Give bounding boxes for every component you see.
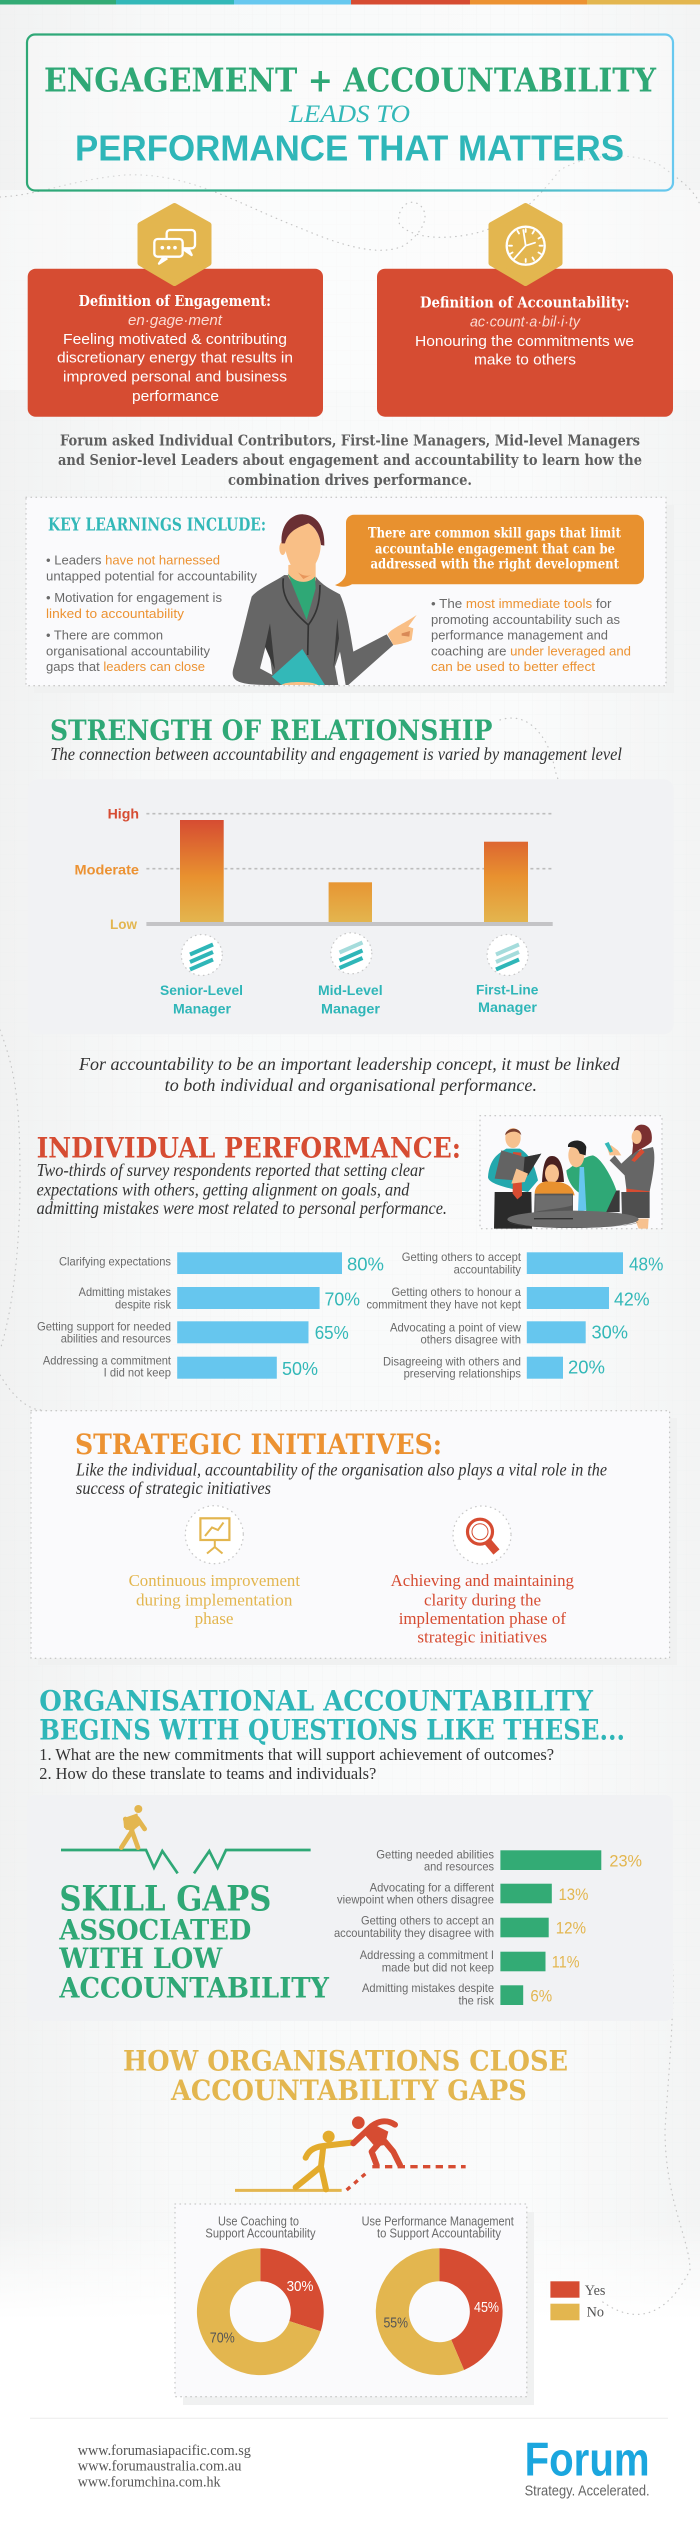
category labels: Senior-Level (160, 983, 243, 998)
bar chart: individual performance, right column (366, 1250, 663, 1381)
intro text (58, 432, 642, 489)
labels: Clarifying expectations (59, 1255, 171, 1269)
callout: addressed with the right development (370, 557, 619, 573)
values (282, 1255, 384, 1379)
values: 50% (282, 1359, 318, 1379)
panel: key learnings (26, 497, 674, 693)
bar chart: skill gaps: Getting others to accept an (361, 1914, 494, 1928)
heading: WITH LOW (58, 1942, 223, 1975)
description: Like the individual, accountability of the organisation also plays a vital role in the (75, 1459, 607, 1479)
callout: accountable engagement that can be (375, 541, 615, 557)
footer websites: www.forumaustralia.com.au (78, 2459, 242, 2475)
values: 80% (347, 1255, 384, 1275)
description: success of strategic initiatives (76, 1478, 271, 1498)
axis labels: Low (110, 916, 137, 932)
bars (180, 820, 528, 923)
definition text (57, 331, 293, 405)
text block: individual performance: expectations with others, getting alignment on goals, and (37, 1179, 410, 1199)
donut: coaching: 30% (287, 2278, 313, 2295)
bar chart: skill gaps: Getting needed abilities (376, 1847, 494, 1861)
right bullet: can be used to better effect (431, 659, 595, 674)
labels: Getting others to honour a (392, 1285, 521, 1299)
axis labels: Moderate (74, 861, 139, 877)
donut: coaching (197, 2248, 324, 2375)
pronunciation: en·gage·ment (128, 313, 223, 329)
title line 3: PERFORMANCE THAT MATTERS (75, 128, 624, 169)
labels: preserving relationships (404, 1367, 521, 1381)
heading (58, 1879, 330, 2004)
labels: others disagree with (420, 1332, 521, 1346)
heading: KEY LEARNINGS INCLUDE: (48, 516, 266, 536)
intro text: Forum asked Individual Contributors, First-line Managers, Mid-level Managers (60, 432, 640, 449)
definition text: Feeling motivated & contributing (63, 331, 287, 348)
bar chart: skill gaps: 12% (556, 1918, 586, 1937)
title line 2: LEADS TO (288, 101, 410, 128)
left bullets: linked to accountability (46, 606, 185, 621)
text: continuous improvement (129, 1571, 300, 1628)
icon: senior level (181, 934, 222, 976)
category labels: First-Line (476, 982, 539, 997)
definition text (415, 333, 634, 368)
category labels (160, 982, 539, 1017)
questions (39, 1745, 554, 1783)
heading: Definition of Accountability: (420, 295, 630, 312)
chart title: performance management: Use Performance Management (362, 2215, 514, 2229)
heading: STRATEGIC INITIATIVES: (75, 1428, 442, 1461)
intro text: and Senior-level Leaders about engagement and accountability to learn how the (58, 452, 642, 469)
chart title: performance management (362, 2215, 514, 2241)
logo: Forum (525, 2433, 650, 2500)
labels: despite risk (115, 1297, 172, 1311)
labels: Admitting mistakes (79, 1285, 171, 1299)
left bullets: untapped potential for accountability (46, 568, 257, 583)
donut: performance management: 55% (384, 2315, 408, 2332)
labels: accountability (454, 1262, 521, 1276)
bar chart: skill gaps: and resources (424, 1860, 494, 1874)
bar chart: individual performance, left column (37, 1252, 384, 1380)
values: 30% (592, 1323, 628, 1343)
axis labels: High (108, 806, 139, 822)
chart title: performance management: to Support Accountability (377, 2227, 502, 2241)
left bullets: gaps that leaders can close (46, 659, 205, 674)
heading: organisational accountability (39, 1685, 625, 1746)
right bullet (431, 596, 631, 674)
labels: Disagreeing with others and (383, 1354, 521, 1368)
illustration: presenter (233, 514, 417, 685)
chart title: coaching (205, 2215, 316, 2241)
text block: leadership concept statement: For accountability to be an important leadership concept, it must be linked (78, 1054, 621, 1074)
icon: mid level (331, 933, 372, 974)
heading: SKILL GAPS (59, 1879, 271, 1920)
text: continuous improvement: during implementation (136, 1590, 293, 1609)
heading: organisational accountability: ORGANISATIONAL ACCOUNTABILITY (39, 1685, 594, 1718)
legend: Yes (585, 2283, 606, 2299)
questions: 1. What are the new commitments that will support achievement of outcomes? (39, 1745, 554, 1764)
panel: strategic initiatives (31, 1411, 677, 1665)
bar chart: skill gaps (334, 1847, 642, 2007)
labels: Getting others to accept (402, 1250, 522, 1264)
labels: Addressing a commitment (43, 1353, 172, 1367)
left bullets: • Motivation for engagement is (46, 590, 222, 605)
text: achieving clarity: clarity during the (424, 1590, 541, 1609)
text block: individual performance (37, 1160, 447, 1218)
values (568, 1255, 663, 1377)
chart title: coaching: Support Accountability (205, 2227, 316, 2241)
text: achieving clarity: Achieving and maintaining (391, 1571, 574, 1590)
left bullets (46, 552, 257, 674)
labels: abilities and resources (61, 1331, 171, 1345)
callout (335, 515, 644, 587)
text block: leadership concept statement: to both individual and organisational performance. (165, 1075, 537, 1095)
intro text: combination drives performance. (228, 472, 472, 489)
panel: donut charts (175, 2204, 534, 2405)
bar chart: skill gaps: 6% (530, 1987, 552, 2006)
heading: how organisations close gaps (123, 2045, 568, 2107)
text block: individual performance: Two-thirds of survey respondents reported that setting clear (37, 1160, 425, 1180)
heading: strength of relationship: STRENGTH OF RELATIONSHIP (50, 714, 492, 747)
heading: how organisations close gaps: ACCOUNTABILITY GAPS (170, 2074, 527, 2107)
donut: performance management: 45% (474, 2299, 499, 2316)
bar chart: skill gaps: Advocating for a different (370, 1880, 495, 1894)
labels: commitment they have not kept (366, 1297, 522, 1311)
left bullets: • Leaders have not harnessed (46, 552, 220, 567)
text: achieving clarity (391, 1571, 574, 1647)
heading: individual performance: INDIVIDUAL PERFORMANCE: (37, 1131, 461, 1164)
bars (527, 1252, 623, 1379)
definition text: improved personal and business (63, 369, 287, 386)
bar chart: skill gaps: 13% (558, 1885, 588, 1904)
callout: There are common skill gaps that limit (368, 525, 621, 541)
definition text: Honouring the commitments we (415, 333, 634, 350)
category labels: Manager (173, 1002, 232, 1017)
panel: skill gaps (27, 1795, 673, 2021)
text: continuous improvement: phase (195, 1609, 234, 1628)
text: achieving clarity: implementation phase of (399, 1609, 566, 1628)
bar chart: skill gaps: made but did not keep (382, 1960, 494, 1974)
footer websites (78, 2443, 251, 2490)
description (75, 1459, 607, 1498)
illustration: team around table (480, 1116, 662, 1229)
text: continuous improvement: Continuous improvement (129, 1571, 300, 1590)
donut: coaching: 70% (210, 2330, 235, 2347)
logo: Forum: Strategy. Accelerated. (525, 2483, 650, 2500)
text: achieving clarity: strategic initiatives (417, 1628, 547, 1647)
right bullet: performance management and (431, 628, 608, 643)
bar chart: skill gaps: viewpoint when others disagree (337, 1893, 494, 1907)
labels: Getting support for needed (37, 1319, 171, 1333)
values: 20% (568, 1357, 605, 1377)
bar chart: skill gaps: Admitting mistakes despite (362, 1981, 494, 1995)
panel: bar chart strength of relationship (28, 779, 674, 1034)
heading: how organisations close gaps: HOW ORGANISATIONS CLOSE (123, 2045, 568, 2078)
bar chart: skill gaps: Addressing a commitment I (360, 1948, 494, 1962)
panel: definition of accountability (377, 206, 673, 417)
bars (177, 1252, 342, 1379)
legend: No (587, 2305, 604, 2321)
panel: definition of engagement (28, 206, 323, 417)
bar chart: skill gaps: 23% (609, 1852, 642, 1871)
left bullets: organisational accountability (46, 643, 210, 658)
title panel (27, 34, 673, 190)
top colour bar (0, 0, 700, 4)
values: 65% (315, 1323, 349, 1343)
labels: Advocating a point of view (390, 1320, 521, 1334)
subheading: strength of relationship: The connection between accountability and engagement is varied by management level (50, 744, 622, 764)
right bullet: promoting accountability such as (431, 612, 620, 627)
category labels: Manager (321, 1002, 381, 1017)
labels (366, 1250, 522, 1381)
heading: ACCOUNTABILITY (58, 1971, 330, 2004)
definition text: make to others (474, 351, 576, 368)
left bullets: • There are common (46, 628, 163, 643)
chart title: coaching: Use Coaching to (218, 2215, 299, 2229)
icon: presentation board (185, 1506, 243, 1564)
heading: organisational accountability: BEGINS WITH QUESTIONS LIKE THESE... (39, 1713, 625, 1746)
legend (550, 2281, 606, 2321)
labels: I did not keep (104, 1366, 171, 1380)
pronunciation: ac·count·a·bil·i·ty (470, 315, 581, 331)
text block: leadership concept statement (78, 1054, 621, 1095)
definition text: discretionary energy that results in (57, 350, 293, 367)
definition text: performance (132, 388, 219, 405)
icon: magnifier (453, 1506, 511, 1564)
axis labels (74, 806, 139, 932)
values: 42% (614, 1290, 650, 1310)
title line 1: ENGAGEMENT + ACCOUNTABILITY (44, 61, 656, 100)
text block: individual performance: admitting mistakes were most related to personal performance. (37, 1198, 447, 1218)
illustration: helping hand figures (235, 2116, 466, 2190)
category labels: Mid-Level (318, 983, 383, 998)
heading: ASSOCIATED (58, 1913, 251, 1946)
icon: hexagon with speech bubbles (140, 206, 208, 283)
footer websites: www.forumchina.com.hk (78, 2474, 221, 2490)
values: 70% (324, 1289, 360, 1309)
values: 48% (629, 1255, 663, 1275)
icon: first line (487, 934, 528, 976)
questions: 2. How do these translate to teams and individuals? (39, 1764, 376, 1783)
icon: walker at crack (61, 1805, 311, 1873)
donut: performance management (376, 2248, 503, 2375)
footer websites: www.forumasiapacific.com.sg (78, 2443, 251, 2459)
labels (37, 1255, 172, 1380)
icon: hexagon with clock (492, 206, 560, 283)
right bullet: • The most immediate tools for (431, 596, 612, 611)
bar chart: skill gaps: 11% (552, 1953, 580, 1972)
bar chart: skill gaps: accountability they disagree with (334, 1926, 494, 1940)
logo: Forum: Forum (525, 2433, 650, 2486)
category labels: Manager (478, 1000, 538, 1015)
bar chart: skill gaps: the risk (458, 1993, 495, 2007)
heading: Definition of Engagement: (79, 293, 271, 310)
right bullet: coaching are under leveraged and (431, 643, 631, 658)
